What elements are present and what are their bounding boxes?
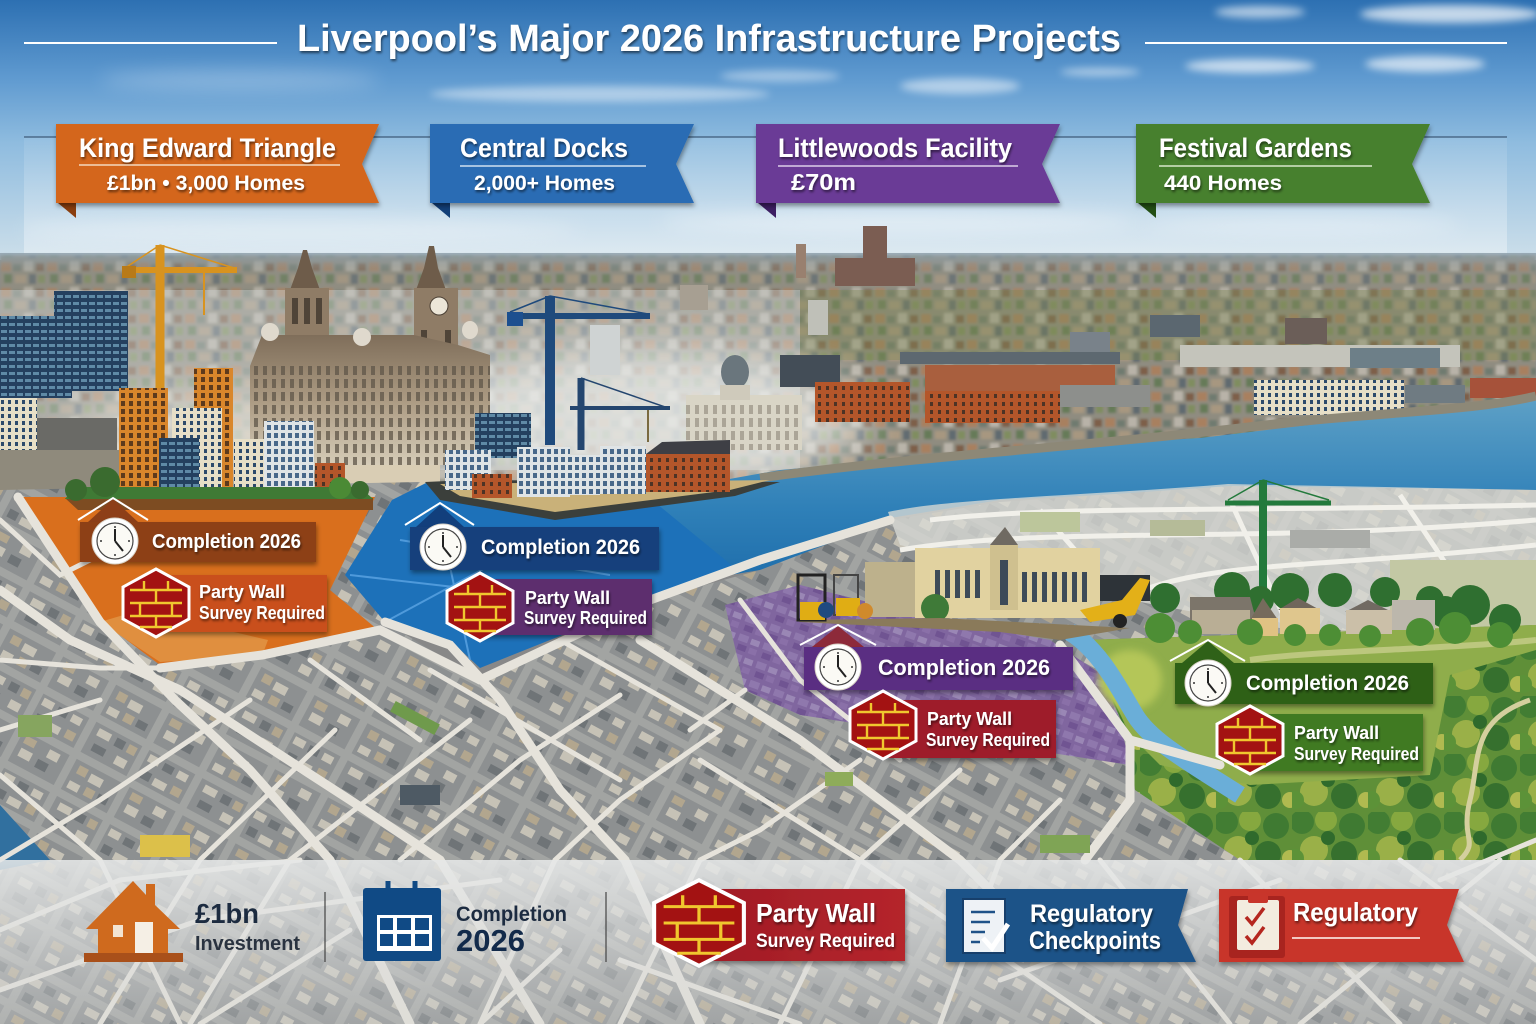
zone: orange lighter plot (100, 610, 268, 662)
badge: party wall orange: Party Wall (199, 582, 285, 602)
stream (1070, 632, 1240, 795)
zone: Festival Gardens (green) (1085, 625, 1536, 860)
legend: party wall badge: Party Wall (756, 898, 876, 928)
badge: completion blue (405, 503, 659, 570)
badge: completion orange: Completion 2026 (152, 531, 301, 553)
King Edward towers (119, 368, 345, 488)
banner: Festival Gardens (1136, 124, 1430, 218)
banner: King Edward Triangle (56, 124, 379, 218)
distant city skyline (0, 253, 1536, 495)
Littlewoods building (795, 527, 1130, 640)
badge: completion green (1170, 640, 1433, 706)
badge: party wall green: Survey Required (1294, 744, 1419, 764)
dock brick buildings (815, 365, 1536, 423)
banner: Littlewoods Facility: £70m (791, 169, 856, 195)
banner: Central Docks: 2,000+ Homes (474, 172, 615, 195)
badge: party wall blue: Party Wall (525, 588, 610, 608)
legend: completion text: Completion (456, 903, 567, 926)
badge: party wall green (1217, 706, 1423, 774)
banner: Central Docks (430, 124, 694, 218)
badge: party wall orange: Survey Required (199, 603, 325, 623)
construction machines left (798, 575, 873, 620)
map base (0, 482, 1536, 1024)
legend strip background (0, 860, 1536, 1024)
blue tower crane (507, 296, 650, 445)
badge: completion purple (800, 625, 1073, 690)
badge: completion purple: Completion 2026 (878, 655, 1050, 680)
badge: party wall blue: Survey Required (524, 608, 647, 628)
north shore pale map (888, 484, 1536, 630)
road network (0, 497, 1536, 1024)
legend: party wall badge: Survey Required (756, 931, 895, 952)
lower left water (0, 805, 50, 870)
tree line and houses (1145, 572, 1521, 648)
park path (1460, 700, 1530, 860)
green crane (1225, 480, 1331, 600)
legend: completion text (456, 903, 567, 958)
legend: regulatory banner: Regulatory (1293, 897, 1418, 927)
title: Liverpool’s Major 2026 Infrastructure Projects (297, 18, 1121, 60)
legend: investment house icon (84, 881, 183, 962)
banner: Central Docks: Central Docks (460, 133, 628, 163)
legend: investment text: Investment (195, 933, 300, 955)
zone: King Edward Triangle (orange) (20, 497, 378, 665)
legend: completion text: 2026 (456, 923, 525, 958)
sky background (0, 0, 1536, 260)
legend: regulatory banner (1219, 889, 1464, 962)
badge: party wall purple: Party Wall (927, 709, 1012, 729)
zone: Central Docks (blue) (345, 482, 735, 668)
banner: Littlewoods Facility: Littlewoods Facility (778, 133, 1012, 163)
zone: Central Docks light water detail (350, 520, 610, 660)
zone: Littlewoods (purple) (725, 585, 1130, 765)
badge: party wall green: Party Wall (1294, 723, 1379, 743)
legend: investment text: £1bn (195, 898, 259, 929)
badge: completion blue: Completion 2026 (481, 536, 640, 559)
Port building (686, 355, 802, 450)
King Edward ground and trees (65, 467, 373, 510)
banner: Festival Gardens: Festival Gardens (1159, 133, 1352, 163)
banner: King Edward Triangle: King Edward Triangle (79, 133, 336, 163)
excavator right (1080, 575, 1150, 628)
banner: Littlewoods Facility (756, 124, 1060, 218)
river bank (760, 396, 1536, 478)
badge: completion green: Completion 2026 (1246, 672, 1409, 695)
legend: calendar icon (363, 881, 441, 961)
badge: party wall purple (850, 691, 1056, 759)
legend: investment text (195, 898, 300, 955)
left glass towers (0, 291, 128, 450)
legend: regulatory checkpoints banner: Checkpoints (1029, 927, 1161, 955)
map colour patches (18, 701, 1090, 857)
clouds (20, 5, 1536, 240)
Central Docks island and buildings (425, 413, 780, 520)
badge: party wall blue (447, 573, 652, 641)
title line left (24, 42, 277, 44)
orange crane (122, 245, 237, 388)
legend: regulatory checkpoints banner: Regulatory (1030, 900, 1153, 928)
Liver Building (250, 246, 490, 465)
title line right (1145, 42, 1507, 44)
zone: meadow (1085, 625, 1536, 785)
cathedral on the horizon (796, 226, 915, 286)
river mersey (640, 398, 1536, 600)
translucent banner panel (24, 137, 1507, 255)
banner: Festival Gardens: 440 Homes (1164, 172, 1282, 195)
legend: regulatory checkpoints banner (946, 889, 1196, 962)
badge: completion orange (78, 498, 316, 564)
blue small crane (570, 378, 670, 450)
banner: King Edward Triangle: £1bn • 3,000 Homes (107, 172, 305, 195)
badge: party wall orange (123, 569, 327, 637)
badge: party wall purple: Survey Required (926, 730, 1050, 750)
legend: party wall badge (654, 880, 905, 966)
